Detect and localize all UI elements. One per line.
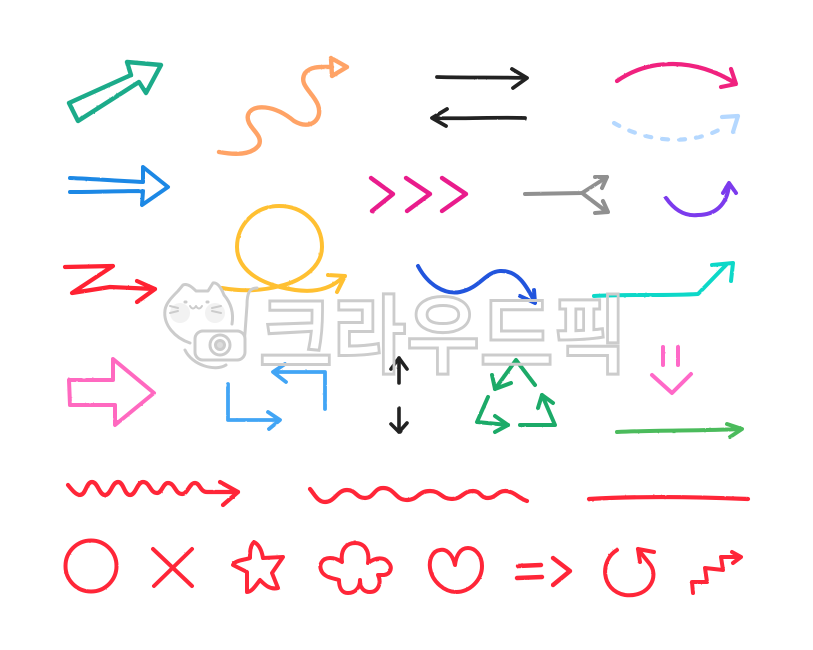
icon: red wavy line xyxy=(310,488,527,502)
icon: red circle xyxy=(66,540,116,592)
icon: black up arrow xyxy=(391,358,407,383)
icon: orange squiggle arrow xyxy=(219,58,347,154)
watermark: Korean wordmark: 크라우드픽 xyxy=(259,289,627,385)
icon: red zigzag arrow xyxy=(65,266,155,302)
icon: blue double-line arrow xyxy=(70,167,168,205)
icon: green long arrow xyxy=(617,424,742,437)
icon: red wavy arrow xyxy=(68,482,238,505)
icon: red flower xyxy=(320,543,391,593)
icon: red heart xyxy=(430,548,482,592)
icon: light blue dashed curved arrow xyxy=(614,116,738,140)
watermark: cat with camera logo xyxy=(165,283,257,368)
icon: teal rising arrow xyxy=(594,263,733,296)
icon: red cross xyxy=(153,549,192,586)
icon: gray fork arrow xyxy=(525,177,608,213)
icon: green recycle arrows xyxy=(477,360,555,432)
icon: black down arrow xyxy=(391,408,407,432)
icon: pink double-line down arrow xyxy=(652,347,691,393)
icon: black left arrow xyxy=(432,109,525,126)
icon: purple curved arrow xyxy=(666,183,736,215)
icon: red circular arrow xyxy=(605,549,654,595)
icon: magenta curved arrow xyxy=(617,64,736,87)
icon: pink outlined arrow xyxy=(69,359,154,425)
icon: yellow loop arrow xyxy=(222,206,345,292)
icon: light blue corner arrow left xyxy=(273,364,325,409)
icon: red star xyxy=(233,542,283,592)
icon: pink chevrons xyxy=(371,178,466,211)
icon: red stair arrow xyxy=(692,552,741,593)
icon: green outlined arrow xyxy=(69,62,161,121)
icon: light blue corner arrow right xyxy=(228,384,280,429)
icon: black right arrow xyxy=(437,69,527,88)
icon: blue wave arrow xyxy=(418,266,535,303)
icon: red double arrow xyxy=(517,558,570,585)
icon: red straight line xyxy=(589,497,748,499)
